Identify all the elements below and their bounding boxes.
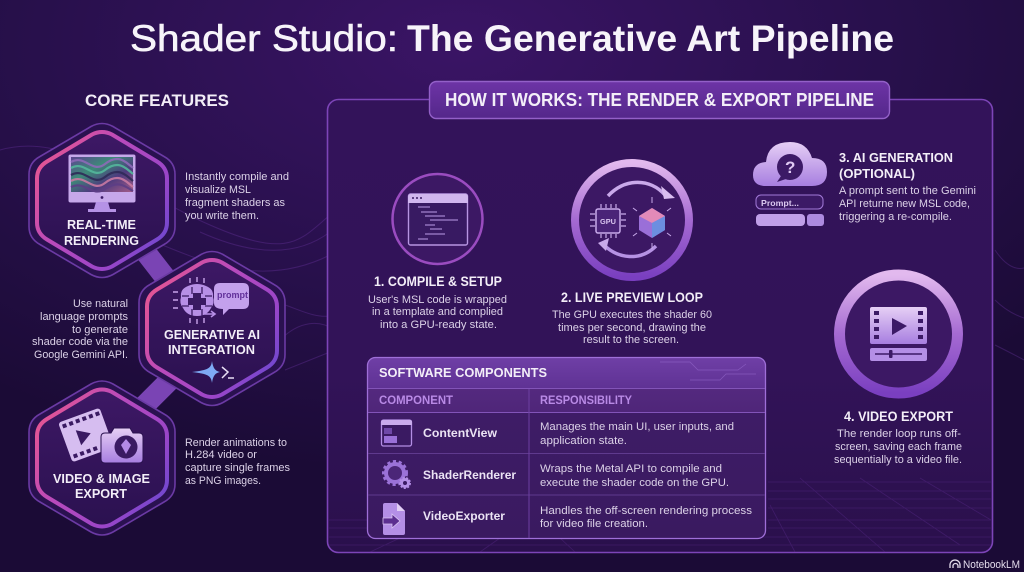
text: into a GPU-ready state.: [380, 319, 497, 331]
icon: brain and prompt bubble: [173, 277, 249, 324]
text: API returne new MSL code,: [839, 198, 970, 210]
text: video and image export description: H.284 video or: [185, 449, 257, 461]
text: [839, 150, 976, 223]
title: Shader Studio:: [130, 18, 398, 59]
row: VideoExporter: [383, 503, 753, 535]
text: [368, 274, 507, 331]
step 3: AI generation: [753, 142, 976, 226]
watermark: NotebookLM: NotebookLM: [963, 559, 1020, 571]
text: A prompt sent to the Gemini: [839, 185, 976, 197]
text: The GPU executes the shader 60: [552, 309, 712, 321]
row: ContentView: [381, 420, 734, 447]
column headers: COMPONENT: [379, 393, 454, 407]
label: VIDEO & IMAGE: [53, 471, 150, 486]
text: video and image export description: as PNG images.: [185, 475, 261, 487]
hexagon connectors: [135, 245, 180, 415]
text: triggering a re-compile.: [839, 211, 952, 223]
text: video and image export description: capture single frames: [185, 462, 290, 474]
text: [552, 290, 712, 346]
column headers: [379, 393, 632, 407]
icon: film strip and camera: [58, 408, 143, 463]
text: real-time rendering description: Instantly compile and: [185, 171, 289, 183]
row: VideoExporter: Handles the off-screen rendering process: [540, 505, 753, 517]
text: generative AI description: shader code via the: [32, 336, 128, 348]
row: ContentView: Manages the main UI, user inputs, and: [540, 421, 734, 433]
text: generative AI description: [32, 298, 128, 361]
text: real-time rendering description: [185, 171, 289, 222]
text: screen, saving each frame: [835, 441, 962, 453]
panel: how it works pipeline: [328, 100, 992, 552]
heading: how it works: [430, 82, 890, 118]
text: video and image export description: [185, 437, 290, 487]
text: generative AI description: Use natural: [73, 298, 128, 310]
panel: core feature generative AI: [139, 252, 285, 406]
icon: monitor: [68, 154, 136, 212]
icon: GPU loop: [575, 163, 689, 277]
row: ContentView: application state.: [540, 435, 627, 447]
panel: core feature real-time rendering: [29, 124, 175, 278]
icon: cloud with question and prompt bar: [753, 142, 827, 226]
heading: how it works: HOW IT WORKS: THE RENDER & EXPORT PIPELINE: [445, 90, 874, 110]
label: INTEGRATION: [168, 342, 255, 357]
text: 4. VIDEO EXPORT: [844, 409, 954, 424]
background waves: [0, 146, 1024, 370]
label: RENDERING: [64, 233, 139, 248]
text: real-time rendering description: visualize MSL: [185, 184, 251, 196]
text: real-time rendering description: you write them.: [185, 210, 259, 222]
text: 2. LIVE PREVIEW LOOP: [561, 290, 703, 305]
row: ShaderRenderer: [384, 462, 729, 489]
icon: GPU loop: GPU: [600, 217, 616, 226]
label: REAL-TIME: [67, 217, 136, 232]
label: [53, 471, 150, 501]
step 4: video export: [834, 275, 962, 466]
icon: cloud with question and prompt bar: Prompt...: [761, 198, 799, 208]
floor grid: [329, 478, 991, 552]
row: VideoExporter: for video file creation.: [540, 518, 648, 530]
row: ContentView: ContentView: [423, 426, 498, 440]
row: ShaderRenderer: Wraps the Metal API to compile and: [540, 463, 722, 475]
text: sequentially to a video file.: [834, 454, 962, 466]
text: 3. AI GENERATION: [839, 150, 953, 165]
icon: gemini sparkle and terminal prompt: [192, 361, 234, 383]
text: 1. COMPILE & SETUP: [374, 274, 502, 289]
text: (OPTIONAL): [839, 166, 915, 181]
table: software components: [368, 358, 766, 538]
text: result to the screen.: [583, 334, 679, 346]
text: generative AI description: to generate: [72, 324, 128, 336]
row: ShaderRenderer: execute the shader code on the GPU.: [540, 477, 729, 489]
table title: SOFTWARE COMPONENTS: [379, 365, 547, 380]
icon: brain and prompt bubble: prompt: [217, 290, 249, 301]
title: [130, 18, 894, 59]
icon: cloud with question and prompt bar: ?: [785, 158, 795, 177]
row: ShaderRenderer: ShaderRenderer: [423, 468, 516, 482]
text: times per second, drawing the: [558, 322, 706, 334]
text: generative AI description: language prompts: [40, 311, 128, 323]
row: VideoExporter: VideoExporter: [423, 509, 505, 523]
text: real-time rendering description: fragment shaders as: [185, 197, 285, 209]
heading: core features: CORE FEATURES: [85, 91, 229, 110]
label: GENERATIVE AI: [164, 327, 260, 342]
text: User's MSL code is wrapped: [368, 294, 507, 306]
step 2: live preview loop: [552, 163, 712, 346]
text: in a template and complied: [372, 306, 503, 318]
text: generative AI description: Google Gemini API.: [34, 349, 128, 361]
label: [64, 217, 139, 248]
icon: film player: [840, 275, 958, 393]
text: [834, 409, 962, 466]
column headers: RESPONSIBILITY: [540, 393, 632, 407]
panel: core feature video and image export: [29, 381, 175, 535]
icon: code window: [392, 174, 482, 264]
label: EXPORT: [75, 486, 127, 501]
text: The render loop runs off-: [837, 428, 961, 440]
label: [164, 327, 260, 357]
step 1: compile and setup: [368, 174, 507, 331]
text: video and image export description: Render animations to: [185, 437, 287, 449]
title: The Generative Art Pipeline: [407, 18, 894, 59]
